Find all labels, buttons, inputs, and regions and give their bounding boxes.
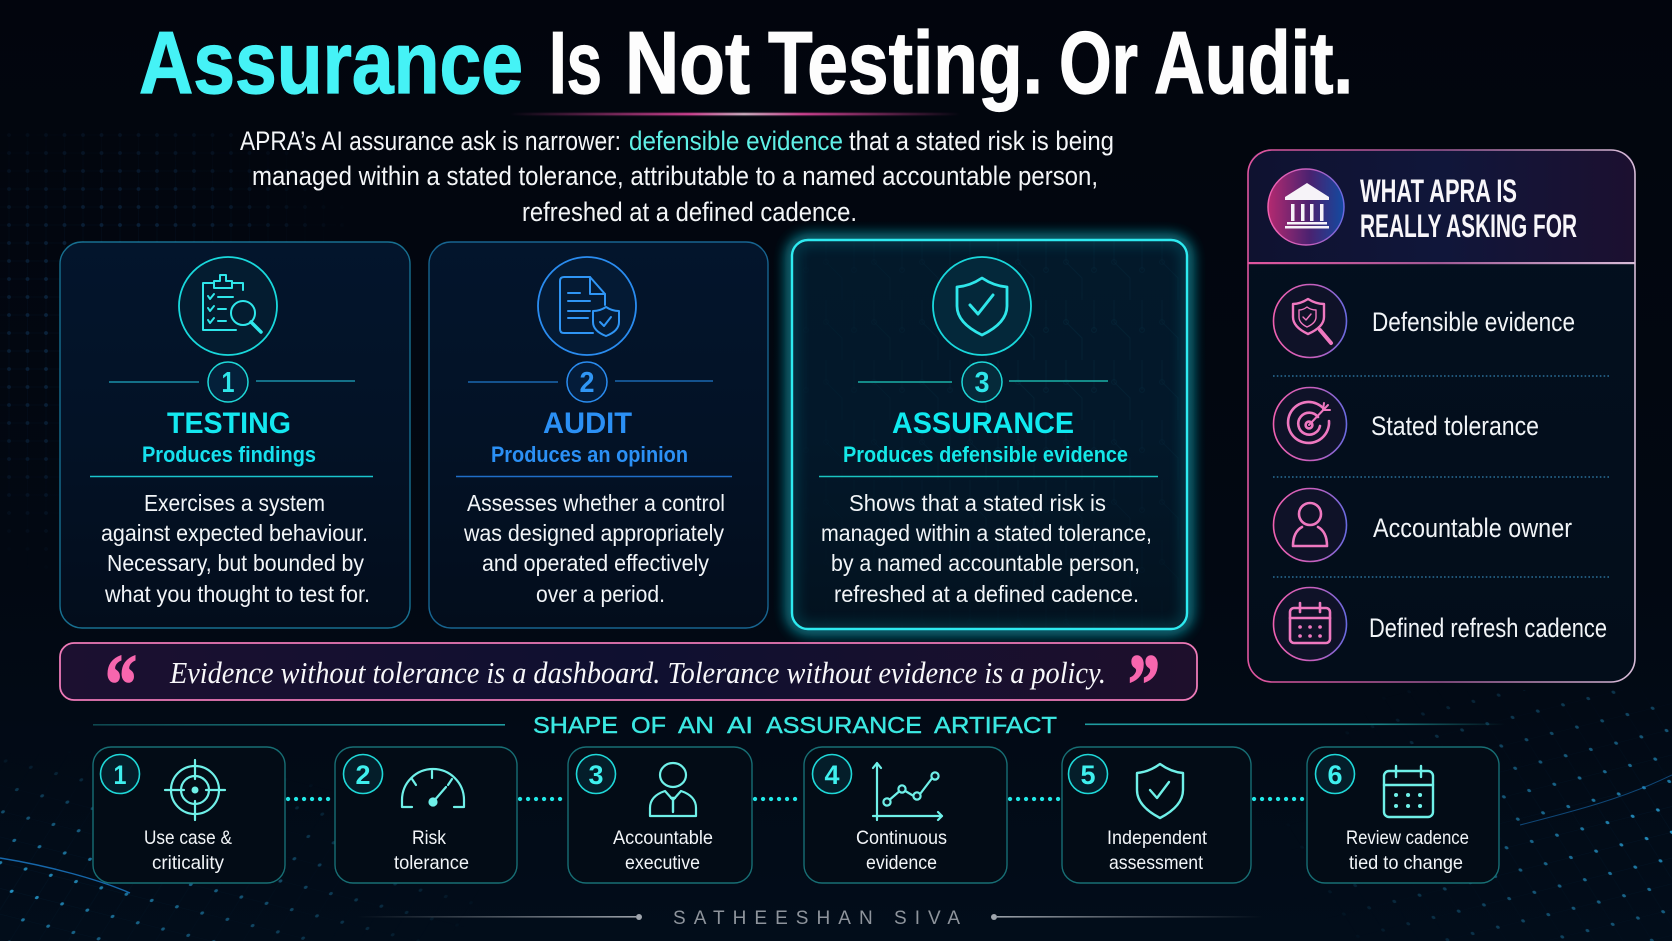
section heading: shape of an AI assurance artifact: AN bbox=[678, 712, 714, 738]
icon: shield with check bbox=[1137, 764, 1183, 818]
number badge 3 bbox=[962, 362, 1002, 402]
intro paragraph: APRA’s AI assurance ask is narrower: bbox=[240, 126, 621, 156]
title: Not bbox=[625, 13, 750, 112]
step 6: review cadence bbox=[1307, 747, 1499, 883]
icon: executive bbox=[650, 763, 696, 816]
body: audit: over a period. bbox=[536, 581, 665, 607]
title: Audit. bbox=[1154, 13, 1353, 112]
step 5: independent assessment: Independent bbox=[1107, 827, 1208, 849]
panel: testing bbox=[60, 242, 410, 628]
number badge 2: 2 bbox=[580, 367, 594, 399]
body: assurance bbox=[821, 490, 1152, 607]
icon: gauge bbox=[402, 769, 464, 807]
intro paragraph: refreshed at a defined cadence. bbox=[522, 197, 857, 227]
icon: bank building bbox=[1268, 169, 1344, 245]
title bbox=[139, 13, 1353, 112]
step 3: accountable executive: Accountable bbox=[613, 827, 713, 849]
body: assurance: Shows that a stated risk is bbox=[849, 490, 1106, 516]
body: testing: Exercises a system bbox=[144, 490, 325, 516]
body: testing bbox=[101, 490, 370, 607]
title: Or bbox=[1059, 13, 1138, 112]
number badge 1 bbox=[208, 362, 248, 402]
icon: clipboard with magnifier bbox=[179, 257, 277, 355]
icon: document with shield bbox=[538, 257, 636, 355]
body: testing: what you thought to test for. bbox=[104, 581, 370, 607]
item: defined refresh cadence: Defined refresh cadence bbox=[1369, 613, 1607, 643]
step 1: use case and criticality bbox=[93, 747, 285, 883]
footer credit: SATHEESHAN SIVA bbox=[673, 908, 960, 929]
number badge 2 bbox=[567, 362, 607, 402]
callout: quote bar: Evidence without tolerance is a dashboard. Tolerance without evidence is a policy. bbox=[169, 655, 1106, 690]
step 1: use case and criticality: Use case & bbox=[144, 827, 232, 849]
item: defined refresh cadence bbox=[1274, 588, 1607, 660]
icon: target bbox=[165, 760, 225, 820]
body: audit: Assesses whether a control bbox=[467, 490, 725, 516]
intro paragraph: that a stated risk is being bbox=[849, 126, 1114, 156]
step 2: risk tolerance: Risk bbox=[412, 827, 446, 849]
step 1: use case and criticality: criticality bbox=[152, 852, 224, 874]
step 5: independent assessment: assessment bbox=[1109, 852, 1204, 874]
panel: assurance (highlighted) bbox=[792, 240, 1187, 629]
step 6: review cadence: 6 bbox=[1328, 760, 1342, 790]
panel heading: WHAT APRA IS bbox=[1360, 173, 1517, 209]
heading: testing: TESTING bbox=[167, 407, 291, 440]
step 3: accountable executive: 3 bbox=[588, 760, 604, 790]
step 2: risk tolerance: 2 bbox=[356, 760, 370, 790]
item: defensible evidence: Defensible evidence bbox=[1372, 307, 1575, 337]
step 6: review cadence: Review cadence bbox=[1346, 827, 1469, 849]
step 4: continuous evidence: Continuous bbox=[856, 827, 947, 849]
body: testing: Necessary, but bounded by bbox=[107, 550, 364, 576]
callout: quote bar bbox=[60, 636, 1197, 732]
subheading: audit: Produces an opinion bbox=[491, 442, 688, 467]
icon: shield with check bbox=[933, 257, 1031, 355]
title: Testing. bbox=[768, 13, 1043, 112]
icon: line chart bbox=[873, 763, 942, 820]
subheading: testing: Produces findings bbox=[142, 442, 316, 467]
body: audit: was designed appropriately bbox=[463, 520, 724, 546]
icon: calendar bbox=[1384, 766, 1433, 817]
body: audit: and operated effectively bbox=[482, 550, 709, 576]
step connectors bbox=[288, 797, 1306, 801]
step 4: continuous evidence bbox=[804, 747, 1007, 883]
step 5: independent assessment bbox=[1062, 747, 1251, 883]
title: Is bbox=[549, 13, 602, 112]
body: assurance: refreshed at a defined cadence. bbox=[834, 581, 1139, 607]
step 2: risk tolerance bbox=[335, 747, 517, 883]
callout: quote bar: ” bbox=[1128, 636, 1160, 732]
number badge 3: 3 bbox=[974, 367, 990, 399]
body: testing: against expected behaviour. bbox=[101, 520, 368, 546]
heading: audit: AUDIT bbox=[543, 407, 632, 440]
step 3: accountable executive: executive bbox=[625, 852, 700, 874]
body: assurance: managed within a stated tolerance, bbox=[821, 520, 1152, 546]
item: stated tolerance bbox=[1274, 388, 1539, 460]
step 1: use case and criticality: 1 bbox=[114, 760, 126, 790]
footer credit bbox=[357, 908, 1263, 929]
item: stated tolerance: Stated tolerance bbox=[1371, 411, 1539, 441]
panel: audit bbox=[429, 242, 768, 628]
section heading: shape of an AI assurance artifact: SHAPE bbox=[533, 712, 618, 738]
step 2: risk tolerance: tolerance bbox=[394, 852, 469, 874]
step 3: accountable executive bbox=[568, 747, 752, 883]
item: accountable owner bbox=[1274, 488, 1572, 562]
step 6: review cadence: tied to change bbox=[1349, 852, 1463, 874]
step 4: continuous evidence: evidence bbox=[866, 852, 937, 874]
body: audit bbox=[463, 490, 725, 607]
body: assurance: by a named accountable person, bbox=[831, 550, 1140, 576]
callout: quote bar: “ bbox=[105, 636, 137, 732]
section heading: shape of an AI assurance artifact: OF bbox=[631, 712, 666, 738]
item: accountable owner: Accountable owner bbox=[1373, 513, 1572, 543]
title: Assurance bbox=[139, 13, 523, 112]
intro paragraph: managed within a stated tolerance, attributable to a named accountable person, bbox=[252, 161, 1098, 191]
section heading: shape of an AI assurance artifact bbox=[93, 712, 1505, 738]
intro paragraph bbox=[240, 126, 1114, 227]
step 5: independent assessment: 5 bbox=[1080, 760, 1096, 790]
section heading: shape of an AI assurance artifact: ASSURANCE bbox=[766, 712, 922, 738]
panel heading bbox=[1360, 173, 1577, 244]
intro paragraph: defensible evidence bbox=[629, 126, 843, 156]
step 4: continuous evidence: 4 bbox=[824, 760, 840, 790]
item: defensible evidence bbox=[1274, 284, 1575, 358]
heading: assurance: ASSURANCE bbox=[892, 407, 1074, 440]
subheading: assurance: Produces defensible evidence bbox=[843, 442, 1128, 467]
panel: what APRA is really asking for bbox=[1248, 150, 1635, 682]
section heading: shape of an AI assurance artifact: ARTIFACT bbox=[934, 712, 1057, 738]
number badge 1: 1 bbox=[222, 367, 234, 399]
section heading: shape of an AI assurance artifact: AI bbox=[727, 712, 753, 738]
